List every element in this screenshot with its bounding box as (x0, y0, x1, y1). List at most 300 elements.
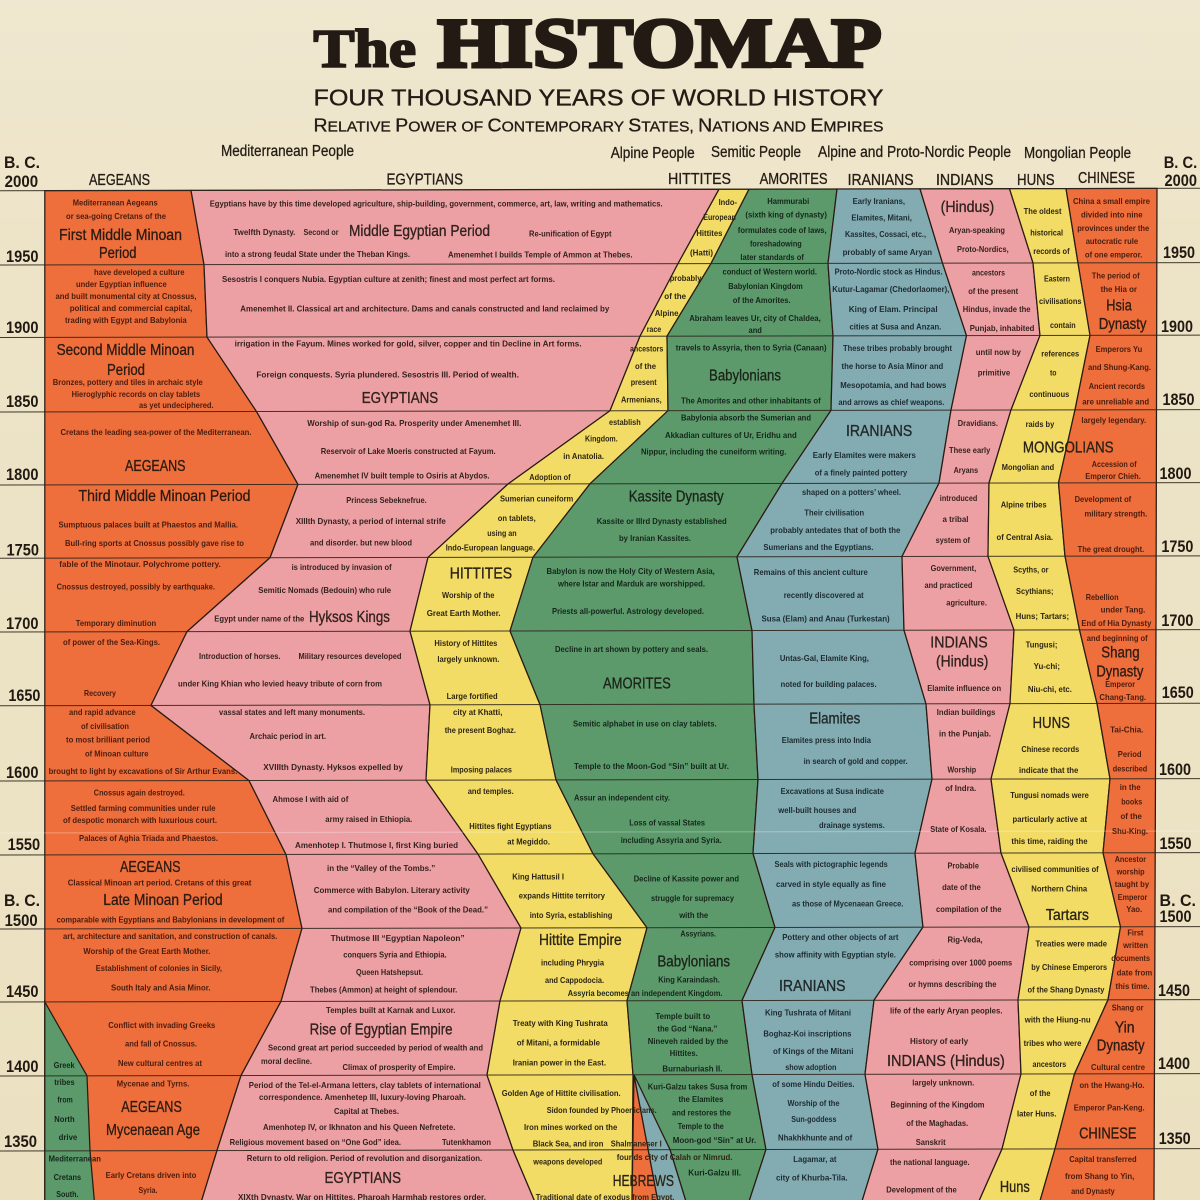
text panel: Hebrews: founds city of Calah or Nimrud. (617, 1152, 732, 1162)
text block: Rig-Veda and Indian life: life of the early Aryan peoples. (890, 1006, 1002, 1016)
text block: early Egypt: Re-unification of Egypt (529, 228, 612, 238)
text block: oldest records: continuous (1029, 389, 1069, 399)
people group headers (221, 143, 1131, 162)
text block: Rig-Veda and Indian life: comprising over 1000 poems (909, 958, 1012, 968)
text block: palaces and Minoan recovery: to most brilliant period (66, 734, 150, 744)
people group headers: Alpine People (611, 145, 695, 162)
right year axis: 1900 (1161, 318, 1193, 336)
text block: Hsia emperors: Development of (1075, 494, 1131, 504)
text block: Hammurabi: Hammurabi (767, 196, 809, 206)
text block: Aryan-speaking Proto-Nordics: primitive (978, 368, 1010, 378)
text block: Early Iranians: Kutur-Lagamar (Chedorlaomer), (832, 284, 949, 294)
text block: Egyptian Empire: correspondence. Amenhetep III, luxury-loving Pharoah. (259, 1092, 466, 1102)
text panel: Hebrews: Shalmaneser I (611, 1138, 662, 1148)
text block: Mitani: of some Hindu Deities. (772, 1079, 854, 1089)
text block: Cnossus culture (56, 267, 196, 325)
text block: Elamite expansion: Elamites press into India (782, 735, 871, 745)
text block: Aryan-speaking Proto-Nordics: Aryans (954, 465, 978, 475)
text block: Shang emperors: written (1122, 940, 1148, 950)
text panel: Hittites (427, 197, 737, 1166)
text block: treaties with Chinese: later Huns. (1017, 1108, 1056, 1118)
text block: Hsia emperors: Emperors Yu (1096, 344, 1142, 354)
text block: Rig-Veda and Indian life: Indian buildings (937, 707, 996, 717)
text block: Early Iranians: Kassites, Cossaci, etc., (845, 229, 926, 239)
text panel: Huns (996, 206, 1114, 1196)
text block: early Cretans (106, 1170, 196, 1195)
text block: Elamite culture: Untas-Gal, Elamite King, (780, 653, 869, 663)
text block: Rig-Veda and Indian life (890, 683, 1012, 1046)
text block: Hyksos rule and New Kingdom: army raised in Ethiopia. (325, 814, 412, 824)
text block: Hittite Empire details (502, 958, 657, 1166)
text block: palaces and Minoan recovery: Cnossus again destroyed. (94, 788, 185, 798)
text block: Aryan-speaking Proto-Nordics: Government, (931, 563, 976, 573)
text block: early China: The period of (1092, 270, 1140, 280)
heading: AEGEANS: AEGEANS (125, 458, 186, 475)
text block: Assur and Kassite decline: Assur an independent city. (574, 792, 670, 802)
text block: Indo-European origins: Hittites (696, 228, 723, 238)
band: Chinese (1040, 188, 1157, 1200)
text block: Cnossus culture: political and commercial capital, (70, 303, 192, 313)
text block: oldest records: contain (1050, 320, 1076, 330)
text block: Shang emperors: Emperor (1105, 679, 1136, 689)
text block: Egyptian Empire: Second great art period succeeded by period of wealth and (268, 1042, 483, 1052)
text block: Rig-Veda and Indian life: Worship (948, 764, 976, 774)
text block: Hyksos rule and New Kingdom: and compilation of the “Book of the Dead.” (328, 904, 488, 914)
text block: oldest records: raids by (1026, 419, 1055, 429)
text block: Elamite expansion: as those of Mycenaean Greece. (792, 898, 903, 908)
text block: Elamite culture: Their civilisation (804, 508, 864, 518)
right year axis: 1500 (1160, 908, 1192, 926)
text panel: Indians (886, 199, 1034, 1194)
heading: Shang Dynasty: Dynasty (1096, 664, 1144, 680)
text block: classical Minoan art: Classical Minoan art period. Cretans of this great (68, 878, 252, 888)
heading: AEGEANS classical: AEGEANS (120, 859, 180, 876)
heading: Rise of Egyptian Empire: Rise of Egyptian Empire (310, 1022, 453, 1038)
text block: Indo-European origins: present (631, 377, 657, 387)
text block: Egyptian Empire: Religious movement based on “One God” idea. (230, 1137, 401, 1147)
text block: Karaindash to Kuri-Galzu: Assyria becomes an independent Kingdom. (568, 988, 722, 998)
nation headers: CHINESE (1078, 170, 1135, 187)
text block: Elamite culture: recently discovered at (784, 590, 864, 600)
text block: Shang emperors: in the (1120, 782, 1141, 792)
heading: Third Middle Minoan Period: Third Middle Minoan Period (78, 488, 250, 505)
text block: bronzes and hieroglyphics: Hieroglyphic records on clay tablets (72, 389, 200, 399)
text block: Aryan-speaking Proto-Nordics: a tribal (942, 514, 968, 524)
band: Indians (862, 189, 1040, 1200)
text block: oldest records: records of (1033, 246, 1070, 256)
text block: Sesostris and Amenemhet: Sesostris I conquers Nubia. Egyptian culture at zenith; finest and most perfect art forms. (222, 274, 555, 284)
text block: Shang emperors: of the (1120, 811, 1142, 821)
text block: late Minoan development: Conflict with invading Greeks (108, 1020, 216, 1030)
text block: Hammurabi: and (748, 325, 762, 335)
text block: Early Iranians: cities at Susa and Anzan. (850, 322, 941, 332)
text block: Shang emperors: Tai-Chia. (1110, 724, 1143, 734)
text block: Hittite history: Great Earth Mother. (427, 608, 501, 618)
text block: Hyksos rule and New Kingdom: Archaic period in art. (250, 731, 326, 741)
text block: early Egypt: Egyptians have by this time developed agriculture, ship-building, government, commerce, art, law, writing and mathematics. (210, 198, 663, 208)
right year axis: 1850 (1162, 391, 1194, 409)
text block: Hwang-Ho culture: on the Hwang-Ho. (1080, 1080, 1144, 1090)
left year axis: 1600 (6, 764, 38, 782)
heading: Yin Dynasty: Dynasty (1097, 1038, 1145, 1054)
text block: Indo-European origins: European (703, 212, 736, 222)
heading: HUNS: HUNS (1032, 715, 1070, 732)
text block: Hittite Empire details: and Cappodocia. (545, 975, 604, 985)
right year axis: B. C. (1160, 892, 1196, 910)
text block: Shang emperors (1099, 679, 1153, 1012)
nation headers: IRANIANS (848, 172, 914, 189)
text block: Alpine tribes and nomads: Scythians; (1016, 586, 1054, 596)
text block: Hittite Empire details: of Mitani, a formidable (517, 1038, 600, 1048)
left year axis: B. C. (4, 154, 40, 172)
text block: treaties with Chinese (1017, 938, 1107, 1118)
text block: Chinese records of raids: Northern China (1031, 884, 1087, 894)
text block: Shang emperors: documents (1111, 953, 1150, 963)
text block: Elamite expansion: carved in style equally as fine (776, 879, 886, 889)
text block: palaces and Minoan recovery: Recovery (84, 688, 116, 698)
heading: Hsia Dynasty (1099, 298, 1147, 333)
text block: palaces and Minoan recovery: Cnossus destroyed, possibly by earthquake. (57, 582, 215, 592)
text block: Hyksos rule and New Kingdom: Temples built at Karnak and Luxor. (326, 1005, 455, 1015)
text block: Elamite culture (754, 450, 916, 689)
text block: Assur and Kassite decline: Semitic alphabet in use on clay tablets. (573, 718, 717, 728)
text block: Hittite history: Imposing palaces (451, 764, 512, 774)
left year axis: 2000 (5, 173, 38, 191)
right year axis: 1700 (1161, 612, 1193, 630)
text block: late Minoan development: New cultural centres at (118, 1058, 202, 1068)
text block: treaties with Chinese: of the Shang Dynasty (1028, 984, 1105, 994)
right year axis: 1350 (1159, 1130, 1191, 1148)
text block: oldest records: Eastern (1044, 274, 1070, 284)
text block: Cnossus culture: trading with Egypt and Babylonia (65, 315, 187, 325)
right year axis: 1950 (1163, 244, 1195, 262)
heading: IRANIANS: IRANIANS (846, 423, 912, 440)
text block: Chinese records of raids: this time, raiding the (1011, 836, 1088, 846)
text block: Elamite culture: Sumerians and the Egyptians. (763, 542, 873, 552)
text block: Shang emperors: this time. (1116, 981, 1150, 991)
text block: Indo-European origins: probably (670, 273, 702, 283)
title word: The: The (314, 19, 416, 79)
text block: palaces and Minoan recovery: Sumptuous palaces built at Phaestos and Mallia. (58, 520, 238, 530)
text block: Kassites and Babylon: Kassite or IIIrd Dynasty established (597, 516, 727, 526)
text block: Assur and Kassite decline: Decline of Kassite power and (634, 874, 739, 884)
text panel: Greek tribes: drive (59, 1132, 78, 1142)
heading: AEGEANS Mycenaean Age (106, 1099, 200, 1139)
text block: Chinese records of raids: indicate that the (1019, 765, 1079, 775)
text block: Hittite history: city at Khatti, (453, 707, 502, 717)
text block: Hyksos rule and New Kingdom: Ahmose I with aid of (272, 794, 348, 804)
text block: sea-going Cretans (66, 198, 166, 221)
text block: Elamite expansion: show affinity with Egyptian style. (775, 950, 896, 960)
text block: Rig-Veda and Indian life: Probable (948, 860, 979, 870)
heading: EGYPTIANS lower: EGYPTIANS (324, 1170, 401, 1187)
text block: Hammurabi: later standards of (740, 252, 804, 262)
text block: late Minoan development: comparable with Egyptians and Babylonians in development of (57, 914, 284, 924)
text block: Elamite culture: probably antedates that of both the (770, 525, 901, 535)
text block: Sesostris and Amenemhet: Foreign conquests. Syria plundered. Sesostris III. Period of wealth. (256, 370, 519, 380)
title (314, 6, 882, 82)
text block: Karaindash to Kuri-Galzu: King Karaindash. (658, 974, 720, 984)
text block: Chinese records of raids: Chinese records (1021, 744, 1079, 754)
text block: Kassites and Babylon: Priests all-powerful. Astrology developed. (552, 606, 704, 616)
text block: Aryan-speaking Proto-Nordics: agriculture. (946, 598, 987, 608)
text block: Indo-European origins: Armenians, (621, 394, 662, 404)
text block: Middle Kingdom to Hyksos: Egypt under name of the (214, 614, 305, 624)
text block: Karaindash to Kuri-Galzu: Kuri-Galzu takes Susa from (648, 1082, 748, 1092)
text block: Early Iranians: Mesopotamia, and had bows (840, 380, 947, 390)
text block: Mitani: Lagamar, at (793, 1154, 837, 1164)
text block: Aryan-speaking Proto-Nordics: and practiced (924, 580, 972, 590)
text block: Sumerian absorption: Babylonia absorb the Sumerian and (681, 412, 811, 422)
text block: oldest records: civilisations (1039, 296, 1082, 306)
text block: Elamite expansion: Seals with pictographic legends (774, 859, 888, 869)
text block: Hittite history (427, 590, 612, 920)
title word: HISTOMAP: HISTOMAP (438, 6, 882, 82)
text block: late Minoan development: and fall of Cnossus. (125, 1038, 197, 1048)
text block: oldest records: historical (1030, 228, 1063, 238)
text block: treaties with Chinese: Treaties were made (1036, 938, 1107, 948)
text block: Kassites and Babylon: Decline in art shown by pottery and seals. (555, 644, 708, 654)
text block: bronzes and hieroglyphics (53, 377, 251, 437)
text block: Rig-Veda and Indian life: in the Punjab. (939, 728, 991, 738)
text block: early China: provinces under the (1077, 223, 1149, 233)
heading: Yin Dynasty: Yin (1115, 1020, 1135, 1036)
text block: Hyksos rule and New Kingdom: Amenhotep I. Thutmose I, first King buried (295, 840, 458, 850)
text block: Hwang-Ho culture: Emperor Pan-Keng. (1074, 1102, 1145, 1112)
text block: Egyptian Empire: Return to old religion. Period of revolution and disorganization. (247, 1153, 482, 1163)
text block: Rig-Veda and Indian life: of Indra. (945, 783, 976, 793)
text block: Hsia emperors: End of Hia Dynasty (1081, 618, 1152, 628)
text block: Hittite history: into Syria, establishing (530, 910, 612, 920)
heading: First Middle Minoan Period: First Middle Minoan (59, 227, 182, 244)
left year axis: 1850 (6, 393, 38, 411)
text block: Shang emperors: First (1127, 928, 1144, 938)
text panel: Aegeans (49, 198, 284, 1195)
heading: First Middle Minoan Period (59, 227, 182, 262)
text block: Aryan-speaking Proto-Nordics: until now by (976, 347, 1021, 357)
text block: Rig-Veda and Indian life: State of Kosala. (930, 824, 987, 834)
text block: Kingdom of the Maghadas (886, 1078, 985, 1194)
text block: Hyksos rule and New Kingdom (178, 651, 488, 1015)
text block: early Egypt (210, 198, 663, 260)
heading: EGYPTIANS: EGYPTIANS (362, 390, 438, 407)
text block: Mitani: King Tushrata of Mitani (765, 1008, 851, 1018)
text block: Karaindash to Kuri-Galzu: the Elamites (678, 1094, 724, 1104)
text block: Mitani: Nhakhkhunte and of (778, 1132, 852, 1142)
text block: Mitani: Worship of the (788, 1098, 840, 1108)
band: Iranians (737, 189, 966, 1200)
left year axis: 1650 (8, 687, 40, 705)
heading: Hsia Dynasty: Dynasty (1099, 316, 1147, 333)
text block: Middle Kingdom to Hyksos: and disorder. but new blood (310, 538, 412, 548)
text panel: Greek tribes: tribes (54, 1077, 75, 1087)
text block: Hittite history: Worship of the (442, 590, 495, 600)
text block: palaces and Minoan recovery: Temporary diminution (76, 618, 156, 628)
text block: Rig-Veda and Indian life: compilation of the (936, 904, 1002, 914)
text block: Hammurabi: Babylonian Kingdom (728, 281, 803, 291)
text block: Hittite history: and temples. (468, 786, 514, 796)
left year axis (4, 154, 40, 1151)
text block: Hsia emperors: military strength. (1084, 508, 1147, 518)
text block: Middle Kingdom to Hyksos: is introduced by invasion of (292, 562, 392, 572)
text block: Hittite history: the present Boghaz. (445, 725, 516, 735)
text block: Hammurabi: (sixth king of dynasty) (745, 210, 827, 220)
text block: Sesostris and Amenemhet (222, 274, 610, 380)
heading: INDIANS (Hindus): (Hindus) (936, 654, 988, 670)
text block: Alpine tribes and nomads: Tungusi; (1026, 640, 1058, 650)
text block: Hittite Empire details: Treaty with King Tushrata (513, 1018, 608, 1028)
text block: Assur and Kassite decline: including Assyria and Syria. (621, 835, 722, 845)
left year axis: 1950 (6, 248, 38, 266)
text block: Elamite expansion: well-built houses and (777, 805, 856, 815)
text block: Karaindash to Kuri-Galzu: Burnaburiash II. (662, 1064, 722, 1074)
heading: Late Minoan Period: Late Minoan Period (103, 892, 223, 909)
heading: INDIANS (Hindus) lower: INDIANS (Hindus) (887, 1053, 1005, 1070)
text block: Karaindash to Kuri-Galzu: Kuri-Galzu III. (688, 1168, 741, 1178)
text block: palaces and Minoan recovery: brought to light by excavations of Sir Arthur Evans. (49, 766, 237, 776)
heading: CHINESE: CHINESE (1079, 1126, 1136, 1142)
text block: early Egypt: Second or (304, 227, 339, 237)
left year axis: 1750 (6, 542, 39, 560)
left year axis: 1400 (6, 1058, 38, 1076)
left year axis: 1900 (6, 319, 38, 337)
text block: Alpine tribes and nomads: Alpine tribes (1001, 500, 1047, 510)
subtitle: FOUR THOUSAND YEARS OF WORLD HISTORY (314, 84, 884, 110)
text block: Egyptian Empire: Period of the Tel-el-Armana letters, clay tablets of international (249, 1080, 481, 1090)
text block: Aryan-speaking Proto-Nordics: system of (936, 535, 970, 545)
text block: Elamite culture: Remains of this ancient culture (754, 567, 868, 577)
text block: Hittite history: largely unknown. (437, 654, 499, 664)
text block: Alpine tribes and nomads: Yu-chi; (1034, 661, 1060, 671)
text block: Early Iranians: Elamites, Mitani, (851, 212, 912, 222)
text block: Cnossus culture: under Egyptian influence (76, 279, 167, 289)
band: Greek tribes (45, 1002, 94, 1200)
text block: Aryan-speaking Proto-Nordics: of the present (968, 286, 1018, 296)
text block: Hsia emperors: Ancient records (1089, 381, 1145, 391)
text block: Hsia emperors: Emperor Chieh. (1085, 471, 1141, 481)
text block: Aryan-speaking Proto-Nordics: Punjab, inhabited (970, 323, 1034, 333)
text block: Hittite history: Hittites fight Egyptians (469, 821, 552, 831)
text block: Karaindash to Kuri-Galzu: Temple built to (656, 1011, 710, 1021)
text block: early China: China a small empire (1073, 196, 1150, 206)
text panel: Greek tribes: South. (56, 1189, 78, 1199)
text block: Hittite Empire details: Sidon founded by Phoenicians. (547, 1105, 657, 1115)
nation headers: EGYPTIANS (386, 172, 463, 188)
heading: AMORITES: AMORITES (603, 676, 671, 692)
text block: Rig-Veda and Indian life: date of the (942, 882, 981, 892)
heading: Hittite Empire: Hittite Empire (539, 932, 622, 949)
text block: Hittite Empire details: Black Sea, and iron (533, 1138, 603, 1148)
text block: Hittite Empire details: Iron mines worked on the (524, 1122, 618, 1132)
text block: Hsia emperors: largely legendary. (1081, 415, 1146, 425)
heading: INDIANS (Hindus): INDIANS (930, 634, 988, 652)
text block: Assur and Kassite decline: with the (678, 910, 708, 920)
text block: late Minoan development: Mycenae and Tyrns. (117, 1078, 189, 1088)
left year axis: 1350 (4, 1133, 37, 1151)
text panel: Hebrews (536, 1138, 732, 1200)
text panel: Greek tribes: Cretans (54, 1172, 81, 1182)
right year axis: 1650 (1162, 684, 1194, 702)
text panel: Chinese (1065, 196, 1153, 1196)
text block: early China (1073, 196, 1150, 294)
text block: Aryan-speaking Proto-Nordics: Hindus, invade the (963, 304, 1031, 314)
text block: Hsia emperors (1075, 344, 1152, 643)
right year axis: 1450 (1158, 982, 1190, 1000)
text block: Kingdom of the Maghadas: Sanskrit (916, 1137, 946, 1147)
heading: Babylonians lower: Babylonians (657, 954, 730, 970)
text block: Middle Kingdom to Hyksos: XIIIth Dynasty, a period of internal strife (296, 516, 446, 526)
text panel: Amorites and Babylonians (546, 196, 827, 1178)
text block: Mitani: of Kings of the Mitani (773, 1046, 853, 1056)
text block: Shang emperors: taught by (1115, 879, 1149, 889)
text block: Kingdom of the Maghadas: Beginning of the Kingdom (890, 1100, 985, 1110)
text block: early Egypt: Amenemhet I builds Temple of Ammon at Thebes. (448, 250, 632, 260)
text block: Hittite history: King Hattusil I (512, 872, 564, 882)
text block: Hyksos rule and New Kingdom: Queen Hatshepsut. (356, 967, 423, 977)
text block: palaces and Minoan recovery: of power of the Sea-Kings. (63, 637, 160, 647)
text block: Indo-European origins: using an (487, 528, 517, 538)
text block: Hammurabi: foreshadowing (750, 238, 802, 248)
tagline: RELATIVE POWER OF CONTEMPORARY STATES, NATIONS AND EMPIRES (314, 116, 884, 136)
text block: Aryan-speaking Proto-Nordics: introduced (940, 493, 977, 503)
people group headers: Alpine and Proto-Nordic People (818, 144, 1011, 161)
right year axis: 1750 (1161, 538, 1193, 556)
text block: Alpine tribes and nomads: of Central Asia. (996, 532, 1053, 542)
heading: Shang Dynasty (1096, 644, 1144, 680)
text block: Hsia emperors: and beginning of (1087, 633, 1148, 643)
heading: AEGEANS Mycenaean Age: Mycenaean Age (106, 1122, 200, 1139)
text block: Hsia emperors: are unreliable and (1082, 396, 1149, 406)
text block: Hyksos rule and New Kingdom: vassal states and left many monuments. (219, 707, 365, 717)
text block: Kassites and Babylon: where Istar and Marduk are worshipped. (557, 578, 705, 588)
text block: Hyksos rule and New Kingdom: Commerce with Babylon. Literary activity (314, 885, 470, 895)
text block: Hittite Empire details: weapons developed (532, 1156, 602, 1166)
left year axis: 1500 (5, 912, 38, 930)
text block: Hammurabi: Abraham leaves Ur, city of Chaldea, (689, 313, 821, 323)
heading: Yin Dynasty (1097, 1020, 1145, 1054)
text block: Kingdom of the Maghadas: the national language. (890, 1157, 970, 1167)
text block: Rig-Veda and Indian life: Elamite influence on (927, 683, 1001, 693)
heading: INDIANS (Hindus) (930, 634, 988, 670)
people group headers: Mongolian People (1024, 145, 1131, 162)
text block: Early Iranians: Proto-Nordic stock as Hindus. (835, 266, 943, 276)
text block: Elamite culture: Susa (Elam) and Anau (Turkestan) (762, 614, 890, 624)
text block: Alpine tribes and nomads: Huns; Tartars; (1016, 611, 1069, 621)
nation headers: INDIANS (936, 172, 993, 189)
text block: early China: divided into nine (1081, 210, 1143, 220)
text block: Early Iranians: King of Elam. Principal (849, 304, 938, 314)
text block: Elamite expansion: Excavations at Susa indicate (781, 786, 884, 796)
heading: First Middle Minoan Period: Period (99, 245, 136, 262)
text block: Hyksos rule and New Kingdom: Thebes (Ammon) at height of splendour. (310, 984, 457, 994)
heading: Elamites: Elamites (809, 710, 861, 728)
heading: Tartars: Tartars (1046, 907, 1089, 924)
text block: palaces and Minoan recovery: fable of the Minotaur. Polychrome pottery. (59, 559, 221, 569)
text block: Kingdom of the Maghadas: of the Maghadas. (906, 1118, 968, 1128)
text block: Karaindash to Kuri-Galzu: Temple to the (678, 1121, 724, 1131)
text panel: Greek tribes: North (54, 1114, 75, 1124)
text block: treaties with Chinese: with the Hiung-nu (1024, 1014, 1091, 1024)
text block: Aryan-speaking Proto-Nordics: Dravidians. (958, 418, 998, 428)
right year axis: 1550 (1160, 835, 1192, 853)
text block: palaces and Minoan recovery: of Minoan culture (85, 748, 149, 758)
text block: Early Iranians (832, 196, 952, 407)
text block: Indo-European origins: Alpine (655, 308, 679, 318)
text block: Early Iranians: These tribes probably brought (843, 343, 952, 353)
text block: Hwang-Ho culture: Cultural centre (1091, 1062, 1145, 1072)
text block: late Minoan development: Establishment of colonies in Sicily, (96, 963, 222, 973)
text block: late Minoan development: art, architecture and sanitation, and construction of canals. (63, 931, 277, 941)
